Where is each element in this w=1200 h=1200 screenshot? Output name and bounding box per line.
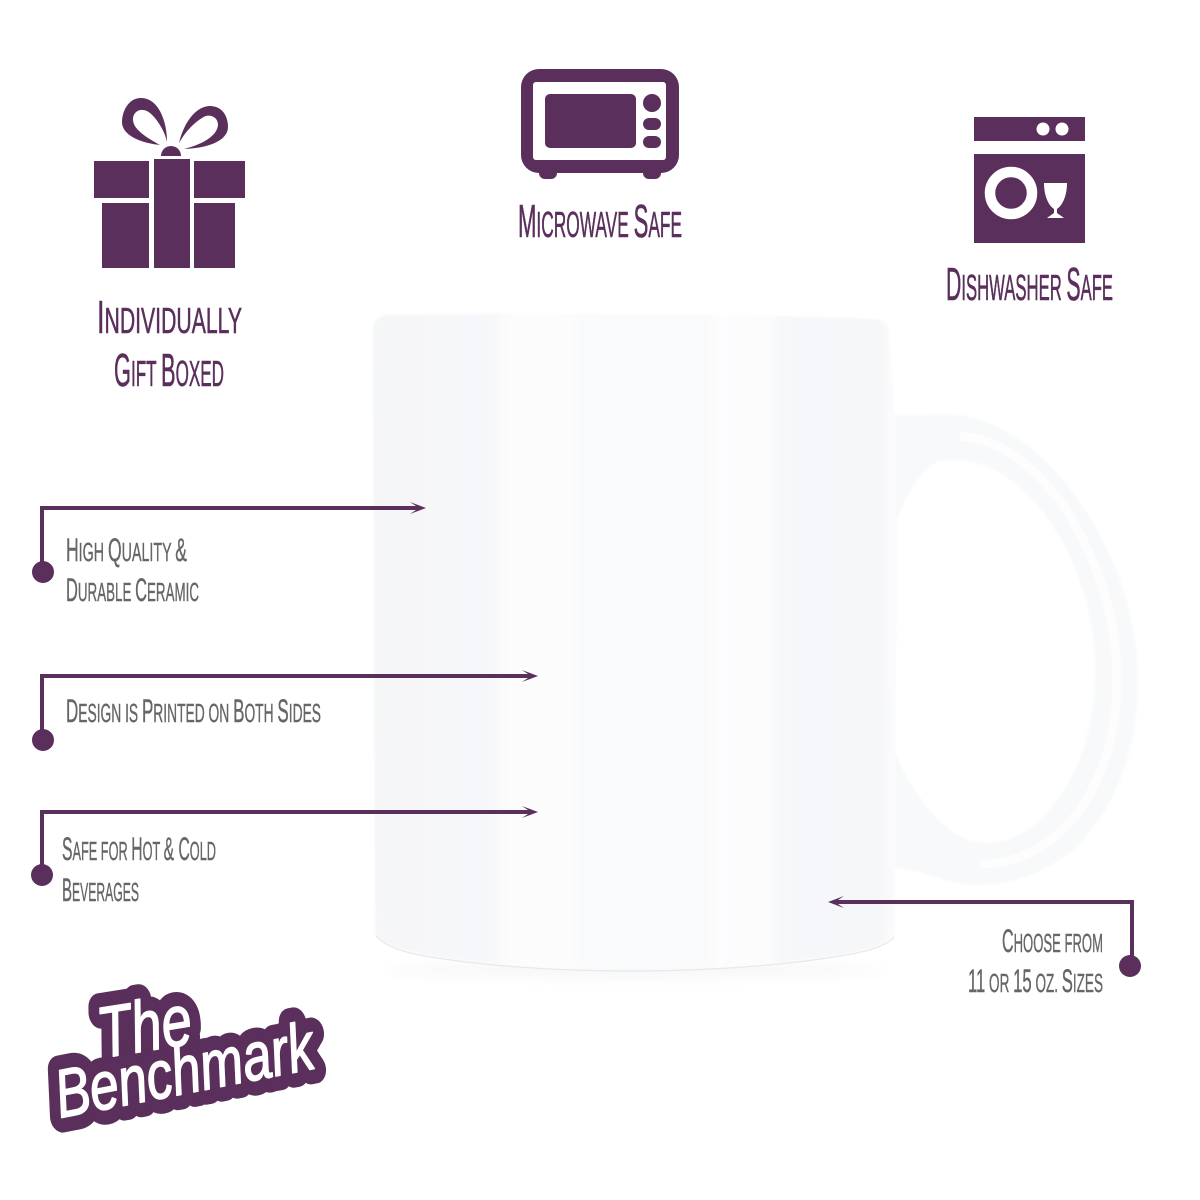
callout: hot and cold beverages: SAFE FOR HOT & COLD bbox=[62, 831, 216, 867]
logo: the benchmark: Benchmark bbox=[48, 1008, 322, 1133]
heading: individually gift boxed: INDIVIDUALLY bbox=[97, 291, 242, 343]
logo: the benchmark: The bbox=[92, 980, 197, 1074]
mug body bbox=[373, 314, 895, 970]
callout: printed on both sides: DESIGN IS PRINTED ON BOTH SIDES bbox=[66, 693, 321, 729]
logo: the benchmark: The bbox=[92, 980, 197, 1074]
arrow: printed sides bbox=[40, 670, 538, 732]
logo: the benchmark: Benchmark bbox=[48, 1008, 322, 1133]
icon: dishwasher bbox=[974, 117, 1085, 243]
callout: size options: CHOOSE FROM bbox=[1002, 923, 1103, 959]
mug bbox=[373, 314, 1138, 978]
callout: high quality ceramic: HIGH QUALITY & bbox=[66, 532, 187, 568]
arrow: sizes bbox=[828, 896, 1134, 958]
callout: high quality ceramic: DURABLE CERAMIC bbox=[66, 572, 199, 608]
icon: microwave bbox=[521, 69, 679, 179]
arrow: beverages bbox=[40, 806, 538, 868]
icon: gift box bbox=[94, 98, 245, 268]
callout: size options bbox=[828, 896, 1141, 999]
callout: hot and cold beverages: BEVERAGES bbox=[62, 872, 139, 908]
heading: individually gift boxed bbox=[97, 291, 242, 396]
mug handle bbox=[888, 412, 1138, 885]
heading: individually gift boxed: GIFT BOXED bbox=[114, 344, 224, 396]
callout: printed on both sides bbox=[32, 670, 538, 751]
arrow: ceramic bbox=[40, 502, 426, 562]
callout: high quality ceramic bbox=[32, 502, 426, 608]
heading: microwave safe: MICROWAVE SAFE bbox=[518, 195, 682, 247]
heading: dishwasher safe: DISHWASHER SAFE bbox=[946, 258, 1113, 310]
callout: hot and cold beverages bbox=[31, 806, 538, 908]
callout: size options: 11 OR 15 OZ. SIZES bbox=[968, 963, 1103, 999]
